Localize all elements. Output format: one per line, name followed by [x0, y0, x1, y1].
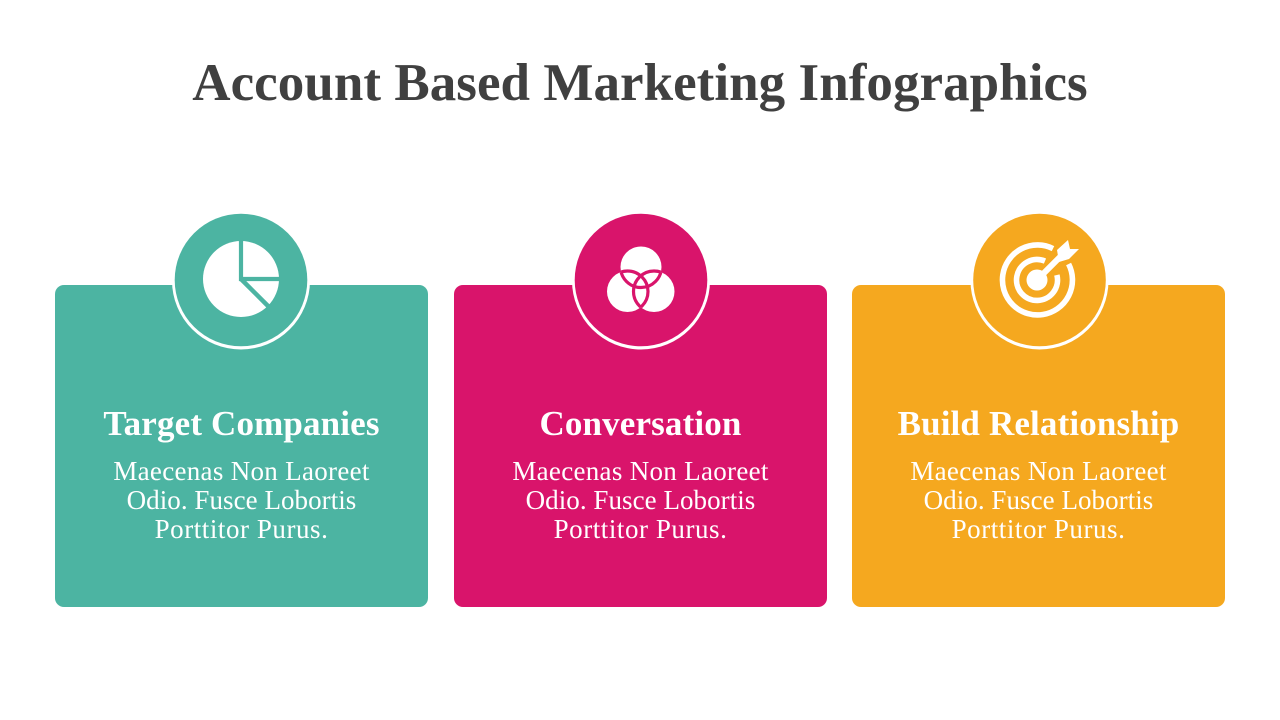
text: build relationship description — [910, 456, 1167, 544]
text: target companies description — [113, 456, 370, 544]
panel: target companies — [55, 285, 428, 607]
heading: conversation: Conversation — [539, 404, 742, 443]
text: conversation description: Maecenas Non Laoreet — [512, 456, 769, 486]
text: build relationship description: Porttitor Purus. — [952, 514, 1125, 544]
heading: target companies: Target Companies — [103, 404, 380, 443]
text: conversation description — [512, 456, 769, 544]
text: target companies description: Maecenas Non Laoreet — [113, 456, 370, 486]
text: target companies description: Odio. Fusce Lobortis — [127, 485, 356, 515]
text: target companies description: Porttitor Purus. — [155, 514, 328, 544]
title: Account Based Marketing Infographics — [192, 54, 1088, 112]
icon: target with arrow badge — [970, 212, 1108, 350]
heading: build relationship: Build Relationship — [898, 404, 1179, 443]
text: conversation description: Odio. Fusce Lobortis — [526, 485, 755, 515]
text: build relationship description: Maecenas Non Laoreet — [910, 456, 1167, 486]
panel: conversation — [454, 285, 827, 607]
text: build relationship description: Odio. Fusce Lobortis — [924, 485, 1153, 515]
text: conversation description: Porttitor Purus. — [554, 514, 727, 544]
icon: pie chart badge — [172, 212, 310, 350]
panel: build relationship — [852, 285, 1225, 607]
icon: overlapping circles badge — [572, 212, 710, 350]
